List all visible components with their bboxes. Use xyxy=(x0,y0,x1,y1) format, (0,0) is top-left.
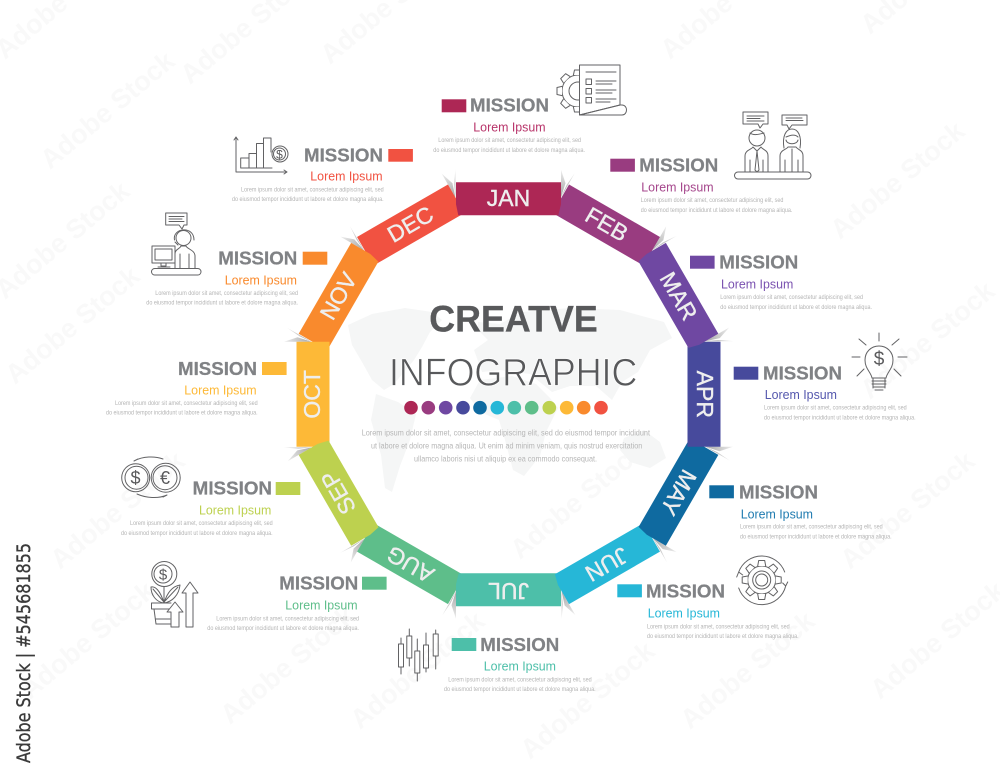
segment: JUN: JUN xyxy=(581,542,633,587)
block: JUN mission: Lorem ipsum dolor sit amet, consectetur adipiscing elit, sed xyxy=(647,624,790,630)
block: OCT mission: Lorem ipsum dolor sit amet, consectetur adipiscing elit, sed xyxy=(115,401,258,407)
centre paragraph xyxy=(362,428,650,463)
watermark: Adobe Stock xyxy=(825,115,971,245)
block: SEP mission: Lorem Ipsum xyxy=(199,503,271,517)
watermark: Adobe Stock xyxy=(15,575,161,705)
block: FEB mission: Lorem Ipsum xyxy=(641,181,714,195)
block: SEP mission: MISSION xyxy=(193,478,272,499)
block: MAY mission: do eiusmod tempor incididunt ut labore et dolore magna aliqua. xyxy=(740,534,892,540)
watermark: Adobe Stock xyxy=(675,605,821,735)
block: AUG mission: MISSION xyxy=(279,572,358,593)
block: JUN mission: do eiusmod tempor incididunt ut labore et dolore magna aliqua. xyxy=(647,634,799,640)
block: MAY mission: Lorem ipsum dolor sit amet, consectetur adipiscing elit, sed xyxy=(740,525,883,531)
watermark: Adobe Stock xyxy=(35,45,181,175)
centre paragraph: ut labore et dolore magna aliqua. Ut enim ad minim veniam, quis nostrud exercitation xyxy=(371,441,642,451)
segment: NOV xyxy=(299,243,380,350)
segment: APR: APR xyxy=(692,371,718,418)
icon: light bulb with dollar xyxy=(852,333,907,390)
block: SEP mission xyxy=(121,478,300,537)
block: OCT mission: Lorem Ipsum xyxy=(184,384,257,398)
block: JUL mission: do eiusmod tempor incididunt ut labore et dolore magna aliqua. xyxy=(444,687,596,693)
block: MAR mission xyxy=(690,252,872,311)
block: DEC mission: Lorem ipsum dolor sit amet, consectetur adipiscing elit, sed xyxy=(241,187,384,193)
block: JUN mission: Lorem Ipsum xyxy=(648,606,720,620)
block: NOV mission: Lorem Ipsum xyxy=(225,273,297,287)
block: FEB mission: do eiusmod tempor incididunt ut labore et dolore magna aliqua. xyxy=(641,208,793,214)
segment: JUL xyxy=(456,573,561,606)
block: AUG mission: Lorem ipsum dolor sit amet, consectetur adipiscing elit, sed xyxy=(216,616,359,622)
icon: light bulb with dollar: $ xyxy=(874,349,885,370)
block: FEB mission: MISSION xyxy=(639,155,718,176)
block: NOV mission: MISSION xyxy=(218,248,297,269)
block: DEC mission: MISSION xyxy=(304,144,383,165)
block: MAR mission: Lorem ipsum dolor sit amet, consectetur adipiscing elit, sed xyxy=(720,295,863,301)
block: SEP mission: Lorem ipsum dolor sit amet, consectetur adipiscing elit, sed xyxy=(130,521,273,527)
block: NOV mission: Lorem ipsum dolor sit amet, consectetur adipiscing elit, sed xyxy=(155,291,298,297)
segment: FEB: FEB xyxy=(581,202,633,247)
block: NOV mission xyxy=(146,248,327,307)
segment: MAY: MAY xyxy=(655,465,702,520)
icon: bar chart with coin xyxy=(234,137,288,174)
icon: dollar and euro coins: € xyxy=(160,468,170,488)
watermark: Adobe Stock xyxy=(505,435,651,565)
segment: DEC xyxy=(357,184,464,266)
watermark: Adobe Stock xyxy=(345,605,491,735)
block: JAN mission: Lorem ipsum dolor sit amet, consectetur adipiscing elit, sed xyxy=(438,138,581,144)
icon: bar chart with coin: $ xyxy=(276,148,283,162)
watermark: Adobe Stock xyxy=(215,600,361,730)
segment: OCT: OCT xyxy=(299,370,325,419)
segment: DEC: DEC xyxy=(383,201,438,248)
icon: two people at a desk xyxy=(734,112,811,179)
segment: MAY xyxy=(637,438,718,546)
block: JAN mission xyxy=(433,95,585,154)
segment: SEP xyxy=(299,438,380,546)
segment: SEP: SEP xyxy=(316,466,361,519)
block: OCT mission xyxy=(106,358,287,417)
fold spikes xyxy=(281,167,736,622)
block: AUG mission: do eiusmod tempor incididunt ut labore et dolore magna aliqua. xyxy=(207,626,359,632)
segment: AUG: AUG xyxy=(382,541,438,588)
block: JAN mission: MISSION xyxy=(470,95,549,116)
colour dots xyxy=(404,401,608,415)
block: JUL mission: MISSION xyxy=(480,634,559,655)
block: DEC mission: Lorem Ipsum xyxy=(310,170,383,184)
icon: dollar and euro coins: $ xyxy=(130,468,141,488)
icon: candlestick chart xyxy=(398,629,438,681)
centre paragraph: ullamco laboris nisi ut aliquip ex ea commodo consequat. xyxy=(414,453,597,463)
icon: plant with coin and arrows: $ xyxy=(159,566,168,584)
block: FEB mission: Lorem ipsum dolor sit amet, consectetur adipiscing elit, sed xyxy=(641,198,783,204)
block: MAR mission: Lorem Ipsum xyxy=(721,278,793,292)
block: APR mission: MISSION xyxy=(763,362,842,383)
block: MAY mission: MISSION xyxy=(739,481,818,502)
segment: MAR xyxy=(637,243,718,350)
segment: MAR: MAR xyxy=(655,267,703,325)
centre paragraph: Lorem ipsum dolor sit amet, consectetur adipiscing elit, sed do eiusmod tempor incididunt xyxy=(362,428,650,438)
block: APR mission: Lorem Ipsum xyxy=(765,388,837,402)
block: JUN mission: MISSION xyxy=(646,580,725,601)
block: NOV mission: do eiusmod tempor incididunt ut labore et dolore magna aliqua. xyxy=(146,301,298,307)
block: JUL mission: Lorem ipsum dolor sit amet, consectetur adipiscing elit, sed xyxy=(448,677,592,683)
block: JUN mission xyxy=(617,580,799,640)
watermark: Adobe Stock xyxy=(515,635,661,765)
block: SEP mission: do eiusmod tempor incididunt ut labore et dolore magna aliqua. xyxy=(121,531,273,537)
block: AUG mission: Lorem Ipsum xyxy=(285,598,358,612)
segment: JAN: JAN xyxy=(487,185,530,211)
title: CREATVE: CREATVE xyxy=(429,298,598,340)
block: OCT mission: do eiusmod tempor incididunt ut labore et dolore magna aliqua. xyxy=(106,411,258,417)
block: JAN mission: do eiusmod tempor incididunt ut labore et dolore magna aliqua. xyxy=(433,148,585,154)
block: JUL mission xyxy=(444,634,596,693)
icon: gear and checklist xyxy=(557,65,626,115)
block: JAN mission: Lorem Ipsum xyxy=(473,120,546,134)
block: MAR mission: MISSION xyxy=(719,252,798,273)
block: APR mission xyxy=(734,362,916,421)
icon: gear with cycle arrows xyxy=(737,556,788,605)
world map xyxy=(348,308,672,492)
block: OCT mission: MISSION xyxy=(178,358,257,379)
block: JUL mission: Lorem Ipsum xyxy=(484,660,556,674)
segment: JUL: JUL xyxy=(488,578,529,604)
source id label: Adobe Stock | #545681855 xyxy=(13,543,35,763)
title: INFOGRAPHIC: INFOGRAPHIC xyxy=(389,352,637,395)
icon: dollar and euro coins xyxy=(122,457,180,498)
icon: support worker at computer xyxy=(152,213,201,275)
watermark: Adobe Stock xyxy=(855,275,1000,405)
segment: OCT xyxy=(296,342,330,447)
segment: AUG xyxy=(357,523,464,604)
segment: FEB xyxy=(553,184,660,266)
block: APR mission: Lorem ipsum dolor sit amet, consectetur adipiscing elit, sed xyxy=(764,406,907,412)
segment: JAN xyxy=(456,182,561,215)
block: MAY mission xyxy=(709,481,892,540)
watermark: Adobe Stock xyxy=(0,260,146,390)
block: FEB mission xyxy=(610,155,793,214)
block: AUG mission xyxy=(207,572,387,632)
block: MAR mission: do eiusmod tempor incididunt ut labore et dolore magna aliqua. xyxy=(720,305,872,311)
block: DEC mission xyxy=(232,144,413,203)
block: APR mission: do eiusmod tempor incididunt ut labore et dolore magna aliqua. xyxy=(764,415,916,421)
segment: APR xyxy=(688,342,720,447)
block: MAY mission: Lorem Ipsum xyxy=(741,507,813,521)
block: DEC mission: do eiusmod tempor incididunt ut labore et dolore magna aliqua. xyxy=(232,197,384,203)
segment: NOV: NOV xyxy=(315,267,362,324)
segment: JUN xyxy=(553,523,660,604)
icon: plant with coin and arrows xyxy=(151,562,198,627)
watermark: Adobe Stock xyxy=(45,445,191,575)
watermark: Adobe Stock xyxy=(835,445,981,575)
